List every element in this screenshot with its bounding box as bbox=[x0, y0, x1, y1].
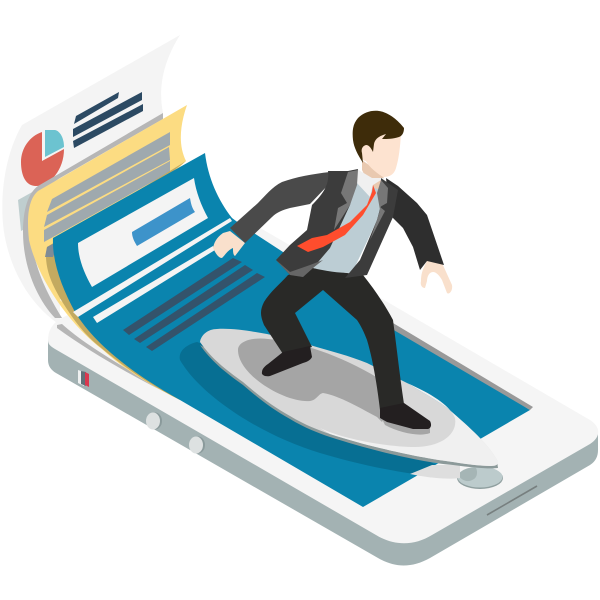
side button 2 bbox=[189, 436, 205, 454]
jacket hem highlight bbox=[276, 260, 323, 277]
phone top face bbox=[48, 222, 598, 543]
speaker slot bbox=[487, 486, 537, 515]
right shoe bbox=[380, 403, 431, 429]
blue sheet and screen bbox=[53, 153, 530, 507]
board tip highlight bbox=[320, 383, 498, 466]
trousers bbox=[261, 268, 404, 410]
slate corner tab bbox=[45, 240, 60, 257]
jacket right front bbox=[345, 178, 398, 278]
deck pad bbox=[238, 338, 390, 422]
middle page: yellow document bbox=[28, 105, 187, 400]
left hand bbox=[213, 231, 245, 258]
neck bbox=[362, 160, 384, 190]
volume switch bbox=[78, 370, 89, 387]
text lines bbox=[73, 92, 143, 148]
left shoe bbox=[262, 346, 312, 376]
businessman bbox=[213, 111, 452, 429]
shoe shadow bbox=[380, 415, 430, 435]
surfboard wake shadow bbox=[180, 342, 460, 479]
smartphone bbox=[48, 222, 598, 566]
back page: white document bbox=[2, 35, 180, 325]
blue button bbox=[132, 198, 195, 246]
white line 1 bbox=[73, 218, 232, 317]
shirt bbox=[313, 180, 382, 273]
teal block behind pages bbox=[18, 190, 36, 231]
white line 2 bbox=[93, 246, 215, 323]
hair bbox=[353, 111, 404, 163]
left lapel bbox=[334, 170, 358, 230]
gray text bars bbox=[44, 132, 170, 242]
surfboard bbox=[200, 329, 498, 468]
face bbox=[364, 134, 401, 177]
jacket left sleeve bbox=[230, 172, 330, 243]
board deck bbox=[200, 329, 498, 466]
page shadow band bbox=[23, 113, 163, 318]
dark page shadow bbox=[46, 161, 186, 400]
side button 1 bbox=[146, 412, 162, 430]
page sheet bbox=[2, 35, 180, 325]
dark text bars bbox=[123, 258, 265, 351]
page shadow band on phone bbox=[57, 324, 175, 397]
white banner panel bbox=[78, 178, 208, 287]
necktie bbox=[297, 185, 376, 252]
screen top shadow strip bbox=[392, 323, 533, 410]
page sheet bbox=[28, 105, 187, 400]
home button bbox=[457, 466, 503, 489]
blue screen and front page bbox=[53, 153, 533, 507]
collar bbox=[356, 169, 384, 197]
pie chart bbox=[21, 130, 64, 186]
jacket right sleeve bbox=[386, 178, 444, 270]
right lapel bbox=[370, 180, 388, 240]
jacket left front bbox=[276, 169, 358, 277]
right hand bbox=[421, 261, 452, 294]
ear bbox=[360, 145, 372, 161]
board edge bbox=[200, 345, 498, 468]
phone side edge bbox=[48, 340, 598, 566]
